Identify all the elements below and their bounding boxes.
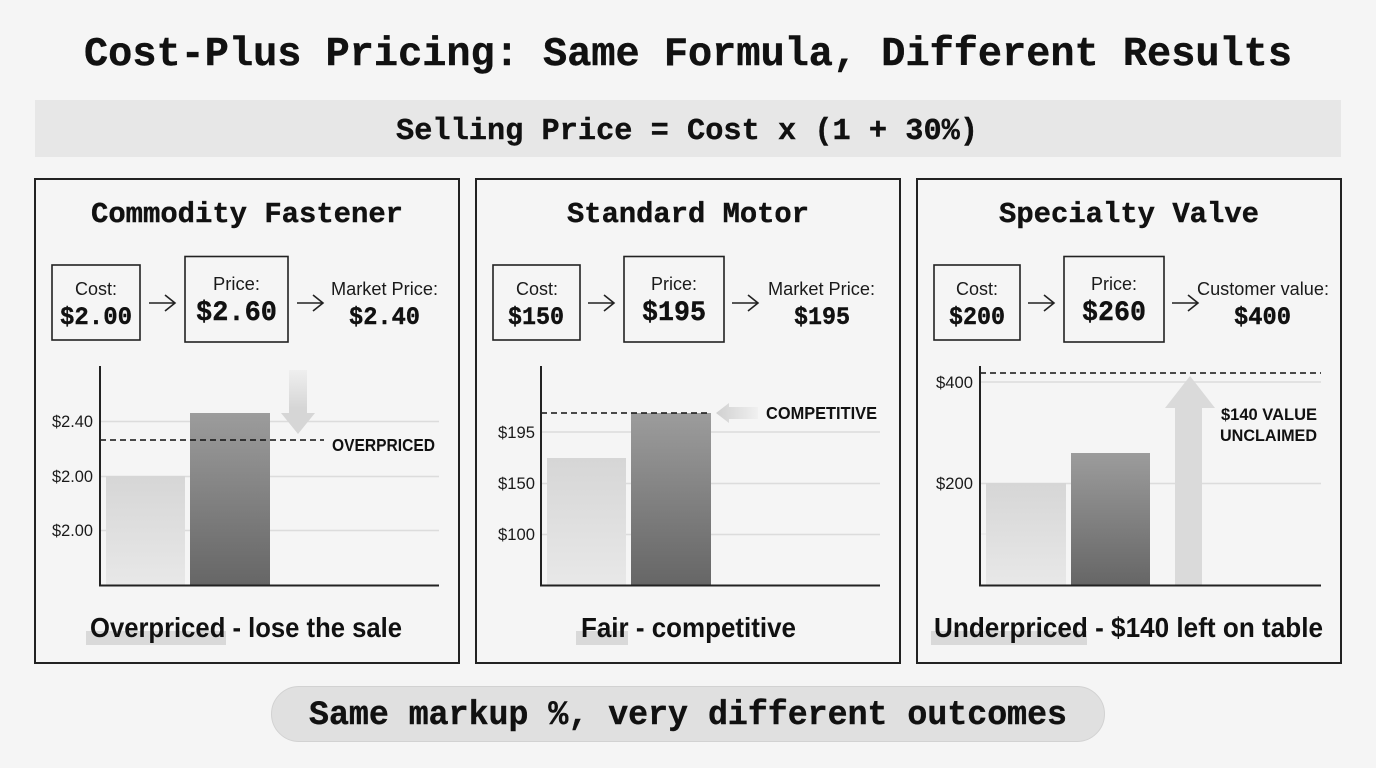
- price box: [624, 256, 724, 342]
- bar chart: $2.00: [52, 521, 93, 540]
- cost box: Cost:: [75, 279, 117, 299]
- panel heading: Standard Motor: [567, 198, 809, 231]
- cost box: Cost:: [516, 279, 558, 299]
- panel heading: Specialty Valve: [999, 198, 1259, 231]
- bar chart: $200: [936, 474, 973, 493]
- arrow: [149, 295, 175, 311]
- callout: OVERPRICED: [332, 435, 435, 455]
- bar chart: [498, 366, 880, 586]
- cost box: $150: [508, 303, 564, 332]
- arrow: [588, 295, 614, 311]
- panel heading: Commodity Fastener: [91, 198, 403, 231]
- callout: UNCLAIMED: [1220, 426, 1317, 445]
- callout: COMPETITIVE: [766, 403, 877, 423]
- price box: Price:: [1091, 274, 1137, 294]
- cost box: $200: [949, 303, 1005, 332]
- takeaway pill: Same markup %, very different outcomes: [309, 697, 1067, 735]
- arrow: [1028, 295, 1054, 311]
- arrow: [297, 295, 323, 311]
- cost box: [493, 265, 580, 340]
- market price: [331, 279, 438, 332]
- bar chart: [936, 366, 1321, 586]
- icon: up arrow: [1165, 376, 1215, 585]
- price box: [185, 256, 288, 342]
- panel: standard motor: [476, 179, 900, 663]
- market price: [768, 279, 875, 332]
- price box: $260: [1082, 298, 1146, 329]
- arrow: [1172, 295, 1198, 311]
- panel: commodity fastener: [35, 179, 459, 663]
- icon: down arrow: [281, 370, 315, 434]
- cost box: [52, 265, 140, 340]
- formula bar: Selling Price = Cost x (1 + 30%): [396, 114, 978, 149]
- market price: Market Price:: [768, 279, 875, 299]
- cost box: $2.00: [60, 303, 132, 332]
- price box: [1064, 256, 1164, 342]
- bar chart: $400: [936, 373, 973, 392]
- callout: [1220, 405, 1317, 445]
- title: Cost-Plus Pricing: Same Formula, Different Results: [84, 32, 1292, 78]
- formula bar: [35, 100, 1341, 157]
- price box: $2.60: [196, 298, 277, 329]
- price box: Price:: [651, 274, 697, 294]
- bar chart: $150: [498, 474, 535, 493]
- market price: Market Price:: [331, 279, 438, 299]
- market price: $195: [794, 303, 850, 332]
- bar chart: $2.40: [52, 412, 93, 431]
- price box: $195: [642, 298, 706, 329]
- market price: $2.40: [349, 303, 420, 332]
- cost box: Cost:: [956, 279, 998, 299]
- takeaway pill: [272, 686, 1104, 742]
- bar chart: $195: [498, 423, 535, 442]
- verdict: Overpriced - lose the sale: [90, 612, 402, 643]
- bar chart: [52, 366, 439, 586]
- icon: left arrow: [716, 403, 758, 423]
- customer value: [1197, 279, 1329, 332]
- callout: $140 VALUE: [1221, 405, 1317, 424]
- price box: Price:: [213, 274, 260, 294]
- bar chart: $2.00: [52, 467, 93, 486]
- verdict: Fair - competitive: [581, 612, 796, 643]
- customer value: Customer value:: [1197, 279, 1329, 299]
- arrow: [732, 295, 758, 311]
- verdict: Underpriced - $140 left on table: [934, 612, 1323, 643]
- bar chart: $100: [498, 525, 535, 544]
- panel: specialty valve: [917, 179, 1341, 663]
- customer value: $400: [1234, 303, 1291, 332]
- cost box: [934, 265, 1020, 340]
